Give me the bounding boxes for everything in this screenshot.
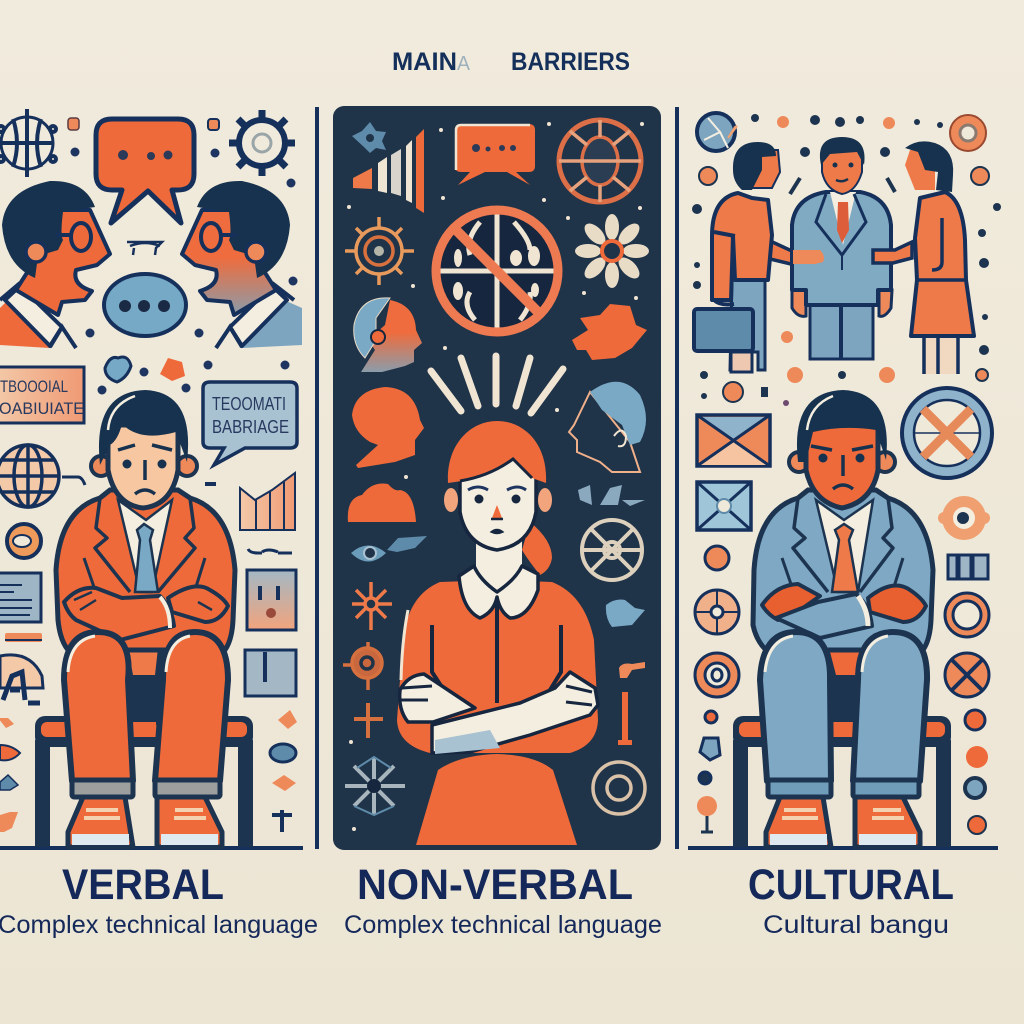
icon: blue and orange head upper	[354, 298, 422, 372]
icon: compass right	[582, 520, 642, 580]
label: non-verbal: Complex technical language	[344, 911, 662, 939]
seat gap	[826, 645, 864, 737]
icon: fragments right	[578, 485, 645, 506]
cuffs	[72, 780, 220, 797]
dark panel background	[333, 106, 661, 850]
label: cultural: CULTURAL	[748, 861, 954, 909]
panel: non-verbal	[333, 106, 661, 850]
icon: orange speech bubble	[455, 124, 535, 185]
label: non-verbal: NON-VERBAL	[357, 861, 633, 909]
figure: right person	[873, 141, 974, 374]
scattered marks	[68, 118, 298, 394]
title: MAIN	[392, 48, 457, 76]
icon: right column icons	[205, 473, 297, 832]
figure: left person	[694, 142, 825, 372]
panel: cultural	[675, 107, 1001, 850]
label: non-verbal	[344, 861, 662, 939]
figure: right man speaking	[182, 181, 302, 348]
icon: right column rings	[945, 555, 989, 730]
figure: left man speaking	[0, 181, 110, 348]
icon: orange speech bubble	[96, 119, 194, 223]
icon: crossed circle	[902, 388, 992, 478]
icon: top left shape	[697, 113, 737, 151]
icon: wheel bottom-left	[345, 757, 405, 815]
chair	[733, 716, 951, 847]
sign: blue speech label	[203, 382, 297, 465]
cuffs	[768, 780, 919, 797]
icon: faucet	[618, 662, 645, 745]
forearm right	[432, 672, 598, 753]
icon: left column rings	[695, 546, 739, 784]
figure: center suit person	[792, 137, 892, 359]
facial features	[474, 494, 484, 504]
figure: woman standing	[397, 421, 598, 845]
icon: megaphone stripes	[353, 129, 424, 213]
sign: blue speech label: TEOOMATI	[212, 394, 286, 414]
icon: small orange sun	[352, 582, 392, 630]
icon: wheel	[559, 120, 641, 202]
sleeves and body	[397, 580, 598, 753]
icon: blue head right	[569, 382, 646, 472]
legs	[760, 632, 831, 781]
specks	[347, 122, 644, 831]
ears	[444, 488, 552, 512]
icon: flower right	[938, 496, 990, 540]
icon: blue gear	[352, 122, 386, 153]
shoes	[68, 797, 222, 847]
divider: left rule and base line	[675, 107, 998, 850]
icon: blue speech bubble	[104, 274, 186, 336]
icon: orange burst	[572, 304, 647, 360]
label: cultural	[748, 861, 954, 939]
neck	[476, 540, 522, 592]
divider: left panel rule and base line	[0, 107, 319, 850]
figure: seated man orange suit	[35, 390, 253, 847]
icon: cross mark	[354, 703, 383, 738]
icon: left column icons	[0, 445, 85, 832]
icon: gear	[229, 110, 295, 176]
icon: orange sun left	[345, 217, 414, 285]
face	[460, 455, 536, 550]
hands	[762, 584, 820, 620]
emphasis rays	[431, 356, 563, 413]
icon: orange pin	[697, 796, 717, 833]
icon: no-globe prohibition	[435, 209, 559, 333]
icon: lower right marks	[965, 746, 988, 834]
icon: orange cloud	[348, 483, 416, 522]
icon: top right ring	[950, 115, 986, 151]
icon: globe network	[0, 109, 56, 177]
icon: right blue blob	[606, 600, 645, 627]
sign: orange label	[0, 367, 84, 423]
title	[392, 48, 630, 76]
sign: orange label: TBOOOIAL	[0, 377, 68, 396]
sign: blue speech label: BABRIAGE	[212, 417, 289, 437]
label: verbal	[0, 861, 318, 939]
icon: flower	[575, 214, 649, 288]
arm	[766, 240, 825, 265]
head	[91, 456, 111, 476]
label: verbal: VERBAL	[62, 861, 224, 909]
label: verbal: Complex technical language	[0, 911, 318, 939]
skirt	[416, 754, 577, 845]
title: BARRIERS	[511, 48, 630, 76]
label: cultural: Cultural bangu	[763, 911, 949, 939]
ponytail	[522, 522, 552, 575]
blurred hand	[793, 250, 824, 264]
icon: orange head left	[352, 387, 424, 468]
chair	[35, 716, 253, 847]
collar	[459, 566, 538, 618]
arms	[64, 588, 174, 640]
torso	[56, 490, 235, 650]
scattered marks	[692, 114, 1001, 406]
seat gap	[125, 645, 165, 737]
icon: left eye	[351, 536, 427, 562]
hand left	[400, 674, 475, 722]
sign: orange label: OABIUIATE	[0, 399, 84, 418]
panel: verbal	[0, 107, 319, 850]
figure: seated man blue suit	[733, 390, 951, 847]
icon: ring	[593, 762, 645, 814]
head	[789, 452, 809, 472]
icon: small target	[343, 642, 382, 690]
forearm sleeve	[776, 594, 872, 638]
icon: blue envelope	[697, 482, 751, 530]
torso	[753, 490, 933, 650]
icon: orange envelope	[697, 415, 770, 466]
hair	[448, 421, 546, 483]
shoes	[766, 797, 920, 847]
legs	[64, 632, 133, 781]
title: A	[457, 53, 471, 75]
